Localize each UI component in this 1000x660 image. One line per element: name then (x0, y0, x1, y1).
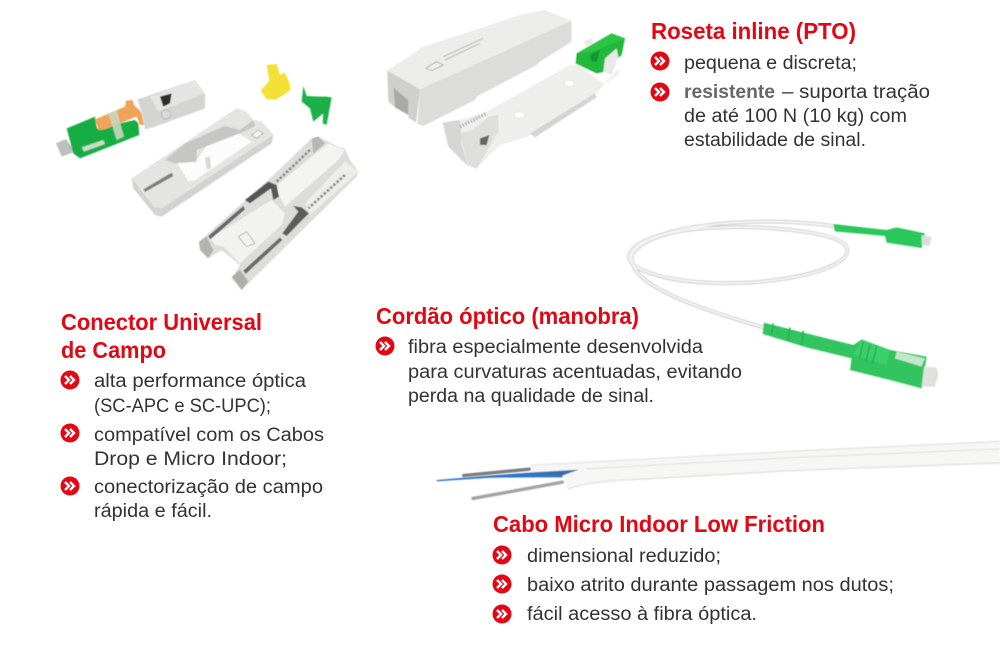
panel: roseta inline (650, 18, 930, 151)
heading (61, 309, 262, 363)
bullet text 1: dimensional reduzido; (527, 546, 721, 567)
green clip (302, 86, 332, 125)
bullet text 2 (684, 82, 930, 151)
middle piece (132, 108, 273, 217)
cord loop (629, 222, 847, 327)
illustration: optical patch cord (629, 222, 938, 388)
panel: conector universal de campo (60, 309, 324, 522)
bullet icon 1 (492, 546, 512, 564)
bullet text 2 (94, 425, 324, 470)
heading: Cabo Micro Indoor Low Friction (493, 511, 825, 537)
bullet text: para curvaturas acentuadas, evitando (408, 362, 742, 383)
cable jacket (528, 440, 1000, 490)
small connector (833, 224, 932, 248)
cable shadow (568, 463, 1000, 489)
bullet text 1: alta performance óptica (94, 371, 306, 392)
bullet icon 3 (60, 476, 80, 496)
bullet text 2: – suporta tração (782, 82, 930, 103)
bullet text (408, 337, 742, 407)
bullet text 1: (SC-APC e SC-UPC); (94, 396, 271, 417)
illustration: field connector parts, housings (132, 108, 358, 290)
heading: Roseta inline (PTO) (651, 18, 856, 44)
heading: Conector Universal (61, 309, 262, 335)
bullet text 3 (94, 477, 323, 522)
bullet text 2: compatível com os Cabos (94, 425, 324, 446)
bullet text 2: de até 100 N (10 kg) com (684, 106, 907, 127)
bullet text 3: conectorização de campo (94, 477, 323, 498)
bottom piece (199, 137, 358, 290)
bullet icon 1 (650, 52, 670, 70)
bullet text 2: Drop e Micro Indoor; (94, 449, 287, 470)
bullet text 3: rápida e fácil. (94, 501, 212, 522)
blue fibre (437, 473, 562, 481)
steel wires (464, 469, 529, 476)
bullet text 3: fácil acesso à fibra óptica. (527, 604, 757, 625)
illustration: field connector parts, top row (56, 64, 332, 158)
cable ridge (531, 441, 1000, 469)
yellow clip (261, 64, 291, 99)
illustration: micro indoor cable (437, 440, 1000, 498)
bullet icon 2 (492, 574, 512, 594)
panel: cordão óptico (376, 303, 742, 407)
heading: de Campo (61, 337, 166, 363)
bullet text 2: resistente (684, 82, 775, 103)
bullet icon 1 (60, 370, 80, 390)
base plate (443, 65, 620, 168)
cable wedge (530, 470, 579, 477)
bullet icon 2 (60, 424, 80, 442)
illustration: inline rosette (387, 10, 572, 126)
bullet icon 2 (650, 82, 670, 102)
bullet text: perda na qualidade de sinal. (408, 386, 654, 407)
green adapter (576, 33, 625, 75)
bullet text 2: estabilidade de sinal. (684, 130, 866, 151)
panel: cabo micro indoor (492, 511, 894, 625)
bullet icon (376, 336, 394, 356)
rosette cover (387, 10, 572, 126)
bullet text 1: pequena e discreta; (684, 53, 857, 74)
heading: Cordão óptico (manobra) (376, 303, 639, 329)
bullet text 2: baixo atrito durante passagem nos dutos; (527, 575, 894, 596)
bullet text 1 (94, 371, 306, 417)
large connector (763, 323, 938, 388)
bullet text: fibra especialmente desenvolvida (408, 337, 703, 358)
bullet icon 3 (492, 604, 512, 624)
illustration: rosette base (443, 33, 625, 168)
assembled connector (56, 80, 205, 158)
